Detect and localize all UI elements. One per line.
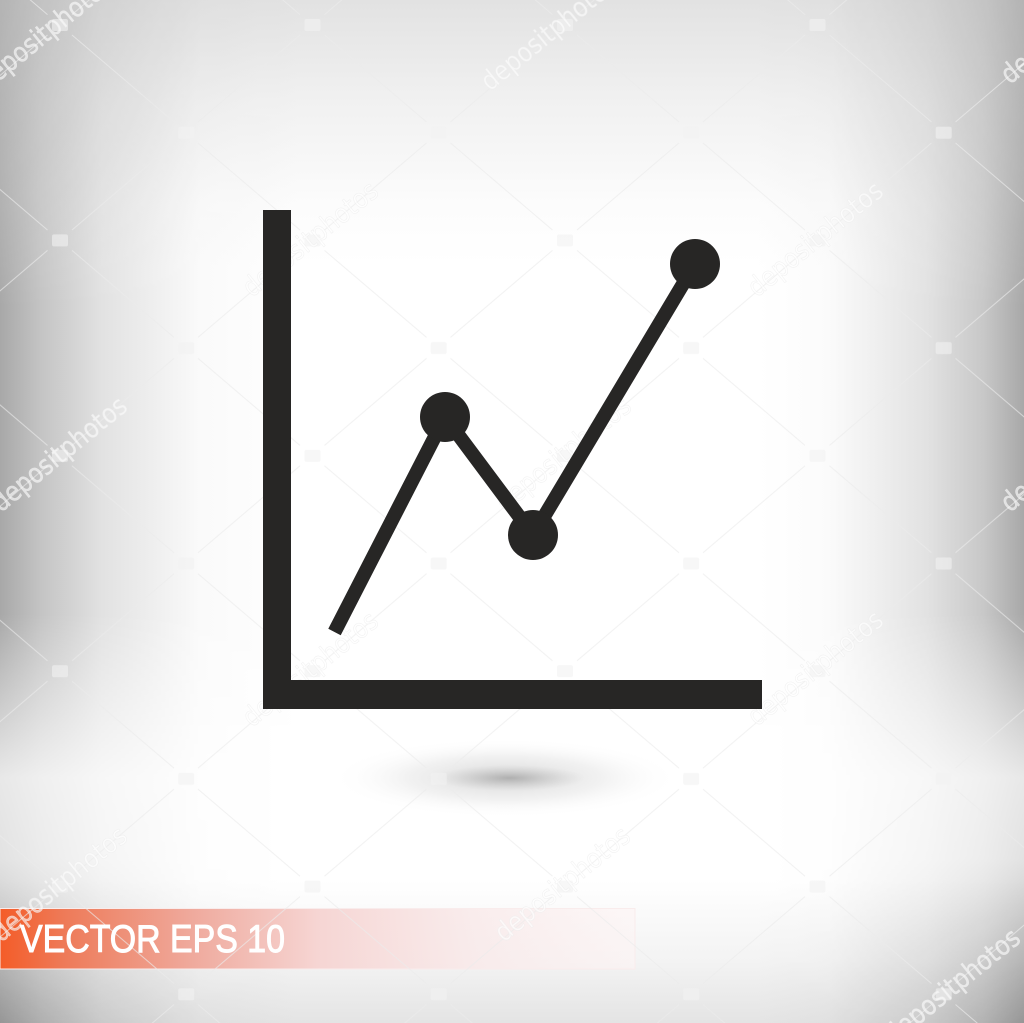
watermark text: depositphotos (237, 175, 385, 303)
icon: line chart (263, 210, 762, 709)
trend line (334, 264, 695, 632)
data point 1 (420, 392, 470, 442)
data point 2 (508, 510, 558, 560)
watermark text: depositphotos (489, 820, 637, 948)
orange banner (0, 908, 635, 969)
y axis (263, 210, 291, 709)
watermark text: depositphotos (742, 604, 890, 732)
watermark text: depositphotos (742, 175, 890, 303)
banner label: VECTOR EPS 10 (20, 918, 285, 961)
data point 3 (670, 239, 720, 289)
x axis (263, 680, 762, 709)
watermark text: depositphotos (237, 605, 385, 733)
watermark text: depositphotos (490, 390, 638, 518)
drop shadow under chart (330, 738, 680, 818)
